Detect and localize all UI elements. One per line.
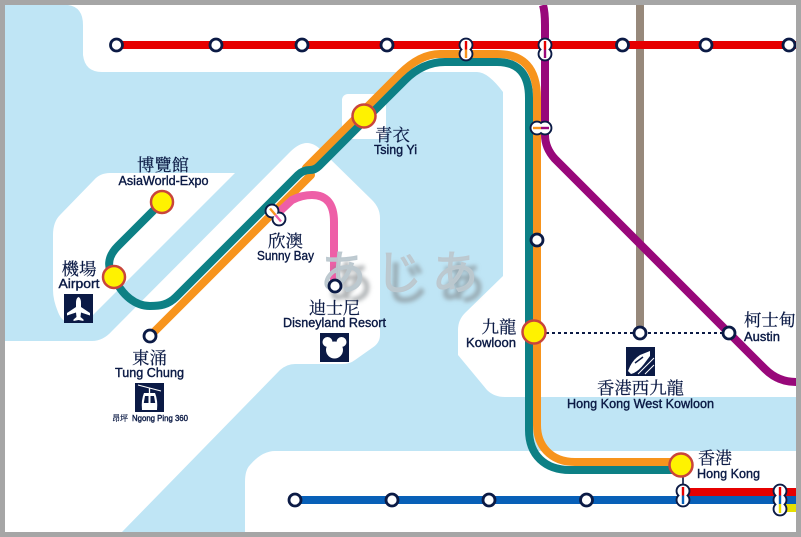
label: Tsing Yi <box>374 126 417 157</box>
south island line: yellow <box>780 504 796 512</box>
watermark: あじあ <box>320 247 478 299</box>
watermark: あじあ <box>327 257 485 309</box>
icon: high speed train <box>626 347 655 376</box>
label: Sunny Bay: 欣澳 <box>268 232 303 251</box>
label: Ngong Ping 360: 昂坪 <box>112 413 128 423</box>
label: Sunny Bay: Sunny Bay <box>257 249 315 263</box>
label: Disneyland Resort: Disneyland Resort <box>283 316 387 330</box>
label: Tsing Yi: 青衣 <box>375 126 410 145</box>
airport express line: teal <box>109 62 681 470</box>
major yellow stations <box>103 104 692 476</box>
label: Austin <box>744 311 796 344</box>
label: Kowloon <box>466 318 516 350</box>
label: AsiaWorld-Expo <box>118 156 209 188</box>
icon: disney mickey <box>320 333 349 362</box>
label: Hong Kong: Hong Kong <box>697 467 760 481</box>
disneyland line: pink <box>278 195 334 286</box>
island line: upper red <box>683 488 796 496</box>
label: Austin: 柯士甸 <box>744 311 796 330</box>
label: Disneyland Resort <box>283 299 387 330</box>
label: Hong Kong: 香港 <box>698 449 732 468</box>
label: Sunny Bay <box>257 232 315 263</box>
high speed rail line: grey <box>636 5 644 333</box>
label: Disneyland Resort: 迪士尼 <box>309 299 360 318</box>
tung chung line: orange <box>150 54 681 462</box>
label: AsiaWorld-Expo: AsiaWorld-Expo <box>118 174 209 188</box>
label: Airport <box>58 260 100 291</box>
label: Tsing Yi: Tsing Yi <box>374 143 417 157</box>
icon: cable car <box>135 383 164 412</box>
label: Airport: 機場 <box>62 260 96 279</box>
icon: airport plane <box>64 294 93 323</box>
label: Airport: Airport <box>58 277 100 291</box>
label: Hong Kong West Kowloon: Hong Kong West Kowloon <box>567 397 714 411</box>
dotted link <box>546 332 729 334</box>
label: AsiaWorld-Expo: 博覽館 <box>137 156 189 175</box>
connector hong kong <box>682 470 684 490</box>
interchange stations <box>266 39 786 515</box>
plain stations <box>110 39 795 506</box>
label: Kowloon: Kowloon <box>466 336 516 350</box>
island line: blue <box>295 496 796 504</box>
label: Ngong Ping 360 <box>112 413 189 423</box>
label: Tung Chung <box>115 349 184 380</box>
label: Hong Kong West Kowloon: 香港西九龍 <box>597 379 684 398</box>
label: Austin: Austin <box>744 330 780 344</box>
label: Kowloon: 九龍 <box>482 318 516 337</box>
tuen ma line: purple <box>543 5 796 382</box>
label: Tung Chung: 東涌 <box>132 349 167 368</box>
label: Ngong Ping 360: Ngong Ping 360 <box>132 414 189 423</box>
label: Tung Chung: Tung Chung <box>115 366 184 380</box>
tsuen wan line: red <box>116 41 796 49</box>
label: Hong Kong West Kowloon <box>567 379 714 411</box>
label: Hong Kong <box>697 449 760 481</box>
